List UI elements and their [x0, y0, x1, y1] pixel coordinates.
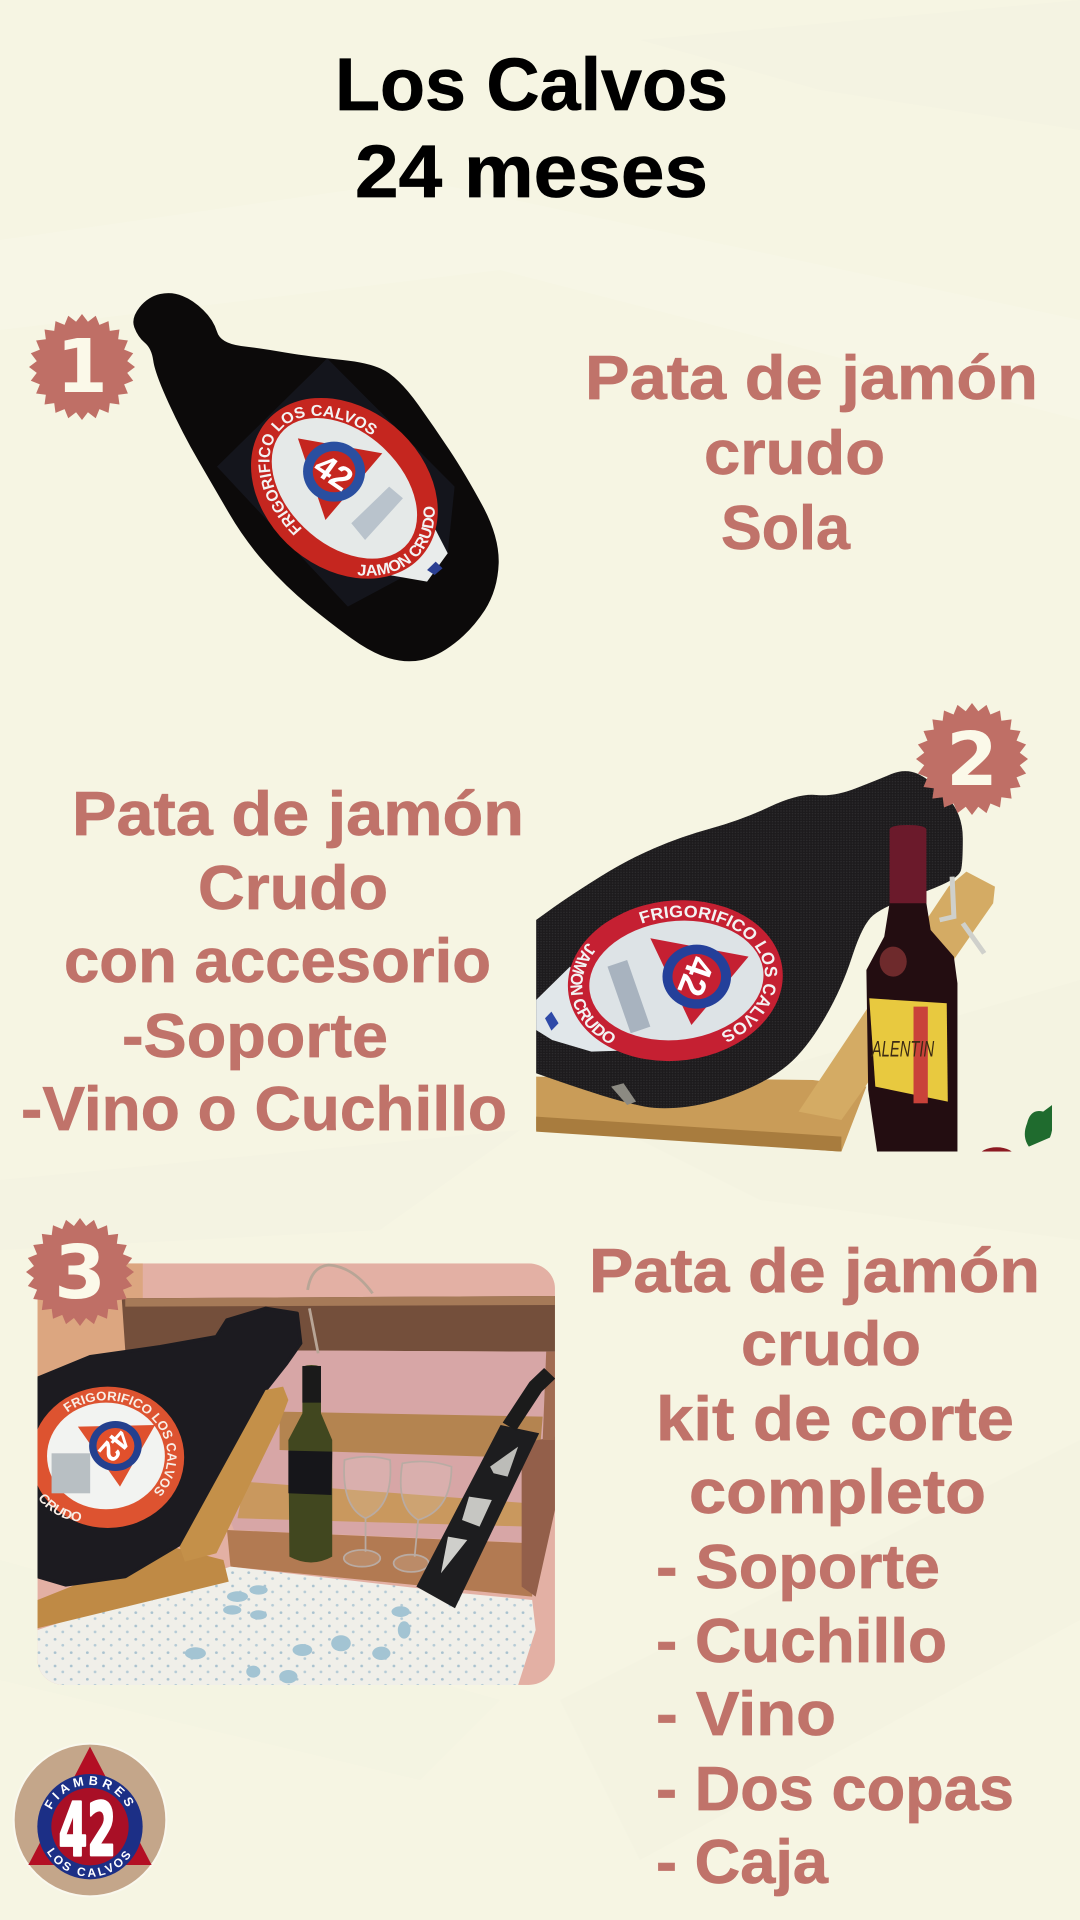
red oval label: FRIGORIFICO LOS CALVOS — [638, 906, 778, 1042]
text: option 2: Crudo — [198, 854, 388, 923]
leaf and cherry — [1025, 1105, 1052, 1147]
text: option 1 — [585, 344, 1038, 563]
text: option 2: -Vino o Cuchillo — [21, 1075, 507, 1144]
logo: Fiambres 42 Los Calvos: 42 — [59, 1788, 116, 1873]
badge: number 2 — [916, 703, 1028, 815]
wooden arm — [799, 872, 995, 1120]
red oval label: JAMON CRUDO — [358, 506, 435, 576]
text: option 3: - Dos copas — [656, 1755, 1014, 1824]
crate top board — [122, 1296, 555, 1352]
orange label — [31, 1387, 184, 1528]
tablecloth flowers — [185, 1585, 410, 1683]
red oval label: FRIGORIFICO LOS CALVOS — [258, 404, 377, 536]
text: option 3: - Caja — [656, 1828, 829, 1897]
photo: kit with ham, wine, glasses and knife: CRUDO — [40, 1494, 82, 1522]
label data block — [607, 960, 650, 1033]
title: Los Calvos — [335, 43, 728, 126]
logo: Fiambres 42 Los Calvos: LOS CALVOS — [47, 1848, 130, 1877]
wooden base — [38, 1547, 229, 1628]
badge: number 3 — [26, 1218, 134, 1326]
text: option 3: - Cuchillo — [656, 1607, 947, 1676]
wine bottle — [866, 891, 958, 1152]
triangle emblem — [298, 438, 382, 520]
white wine bottle — [288, 1365, 332, 1562]
photo: kit with ham, wine, glasses and knife — [38, 1263, 555, 1685]
photo: kit with ham, wine, glasses and knife: 42 — [91, 1423, 138, 1467]
badge: number 1 — [29, 314, 135, 420]
title: 24 meses — [355, 130, 708, 213]
tablecloth — [38, 1567, 536, 1685]
hook wire — [308, 1265, 373, 1353]
text: option 2 — [21, 780, 524, 1144]
text: option 3: - Soporte — [656, 1533, 940, 1602]
text: option 3: kit de corte — [656, 1385, 1014, 1454]
badge: number 3: 3 — [54, 1230, 106, 1316]
ham silhouette — [133, 293, 499, 661]
photo: ham 2 with stand and wine: ALENTIN — [870, 1036, 935, 1061]
text: option 3: crudo — [741, 1310, 921, 1379]
text: option 3 — [589, 1237, 1040, 1897]
label tail — [379, 517, 448, 582]
text: option 2: -Soporte — [122, 1002, 388, 1071]
title — [335, 43, 728, 213]
wine label — [869, 998, 948, 1102]
dark label backing — [217, 358, 455, 607]
logo: Fiambres 42 Los Calvos — [13, 1743, 167, 1897]
photo: ham 1 in black cover: 42 — [306, 447, 360, 499]
wall — [38, 1263, 555, 1685]
ham in mesh — [536, 771, 963, 1108]
triangle emblem — [650, 938, 749, 1025]
knife kit — [416, 1425, 539, 1608]
wine glasses — [344, 1457, 451, 1572]
photo: ham 1 in black cover — [133, 293, 499, 662]
text: option 3: - Vino — [656, 1680, 836, 1749]
crate right post — [522, 1437, 555, 1597]
crate interior wall — [232, 1350, 546, 1542]
logo: Fiambres 42 Los Calvos: FIAMBRES — [44, 1776, 134, 1810]
badge: number 1: 1 — [56, 324, 108, 410]
photo: ham 2 with stand and wine — [536, 771, 1052, 1152]
crate shelf — [227, 1530, 532, 1597]
crate slats — [280, 1412, 543, 1458]
photo: kit with ham, wine, glasses and knife: FRIGORIFICO LOS CALVOS — [62, 1392, 177, 1496]
photo: ham 2 with stand and wine: 42 — [669, 951, 723, 1001]
text: option 2: con accesorio — [64, 927, 491, 996]
wooden base — [536, 1077, 866, 1152]
red oval label — [568, 900, 783, 1062]
text: option 3: completo — [689, 1458, 986, 1527]
red oval label — [251, 398, 438, 579]
text: option 2: Pata de jamón — [72, 780, 524, 849]
text: option 1: crudo — [704, 419, 885, 488]
badge: number 2: 2 — [946, 717, 998, 803]
stand arm — [180, 1387, 288, 1562]
text: option 3: Pata de jamón — [589, 1237, 1040, 1306]
label tail — [536, 966, 618, 1052]
text: option 1: Sola — [721, 494, 851, 563]
red oval label: JAMON CRUDO — [570, 944, 615, 1043]
label data block — [351, 487, 403, 540]
text: option 1: Pata de jamón — [585, 344, 1038, 413]
ham — [38, 1308, 301, 1585]
hook — [940, 877, 984, 953]
tag on cover — [611, 1083, 636, 1105]
